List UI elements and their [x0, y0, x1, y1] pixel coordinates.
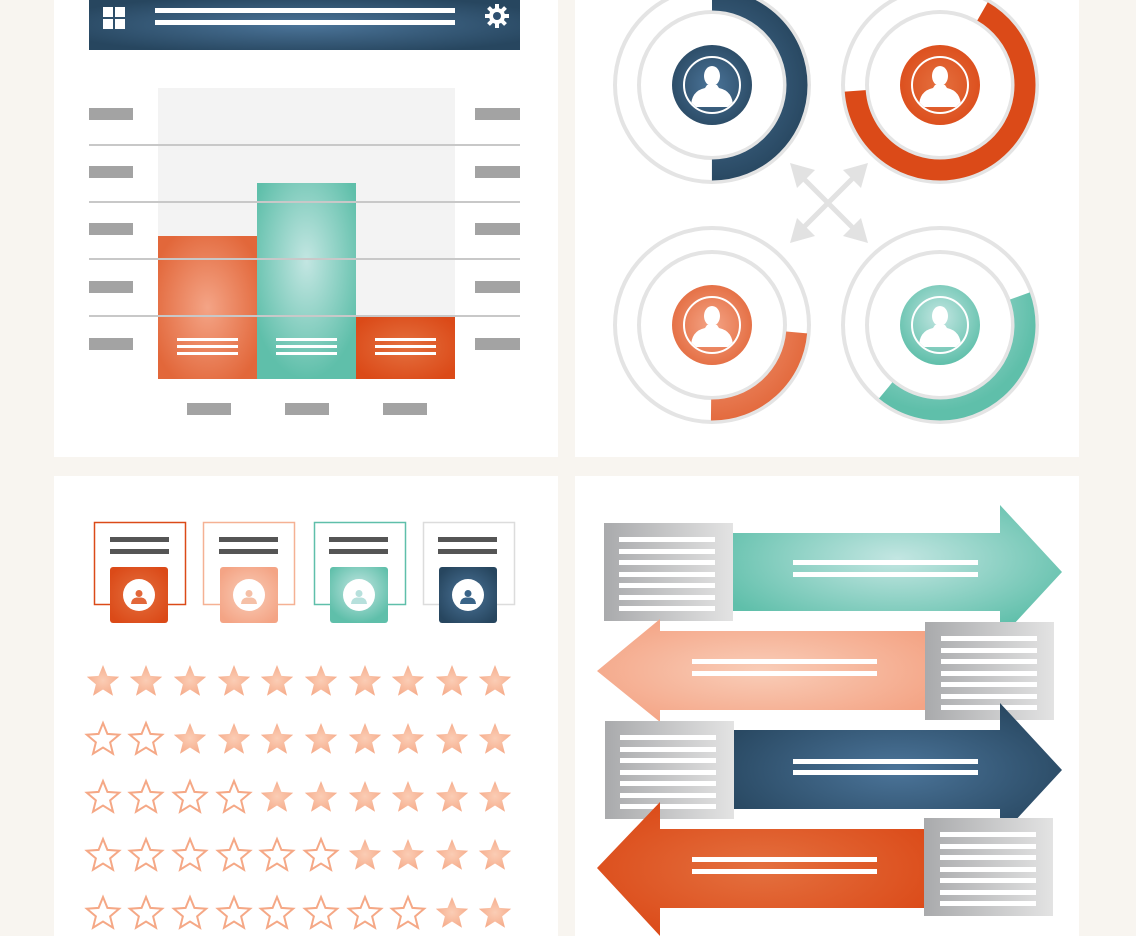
arrows: cross: [790, 163, 868, 243]
header bar: [89, 0, 520, 50]
profile cards: [94, 522, 514, 623]
star ratings: [87, 665, 511, 928]
icon: gear: [485, 4, 509, 28]
panel: progress rings: [575, 0, 1079, 457]
arrow 1 teal right: [604, 505, 1062, 639]
panel: arrows process: [575, 476, 1079, 936]
arrow 2 peach left: [597, 619, 1054, 722]
bar chart: [89, 88, 520, 415]
ring: navy: [615, 0, 809, 182]
icon: grid menu: [103, 7, 125, 29]
arrow 3 navy right: [605, 703, 1062, 837]
panel: bar chart dashboard: [54, 0, 558, 457]
ring: red: [841, 0, 1039, 184]
ring: teal: [841, 226, 1039, 424]
panel: profile cards and star ratings: [54, 476, 558, 936]
ring: orange: [615, 228, 809, 422]
arrow 4 red left: [597, 802, 1053, 936]
